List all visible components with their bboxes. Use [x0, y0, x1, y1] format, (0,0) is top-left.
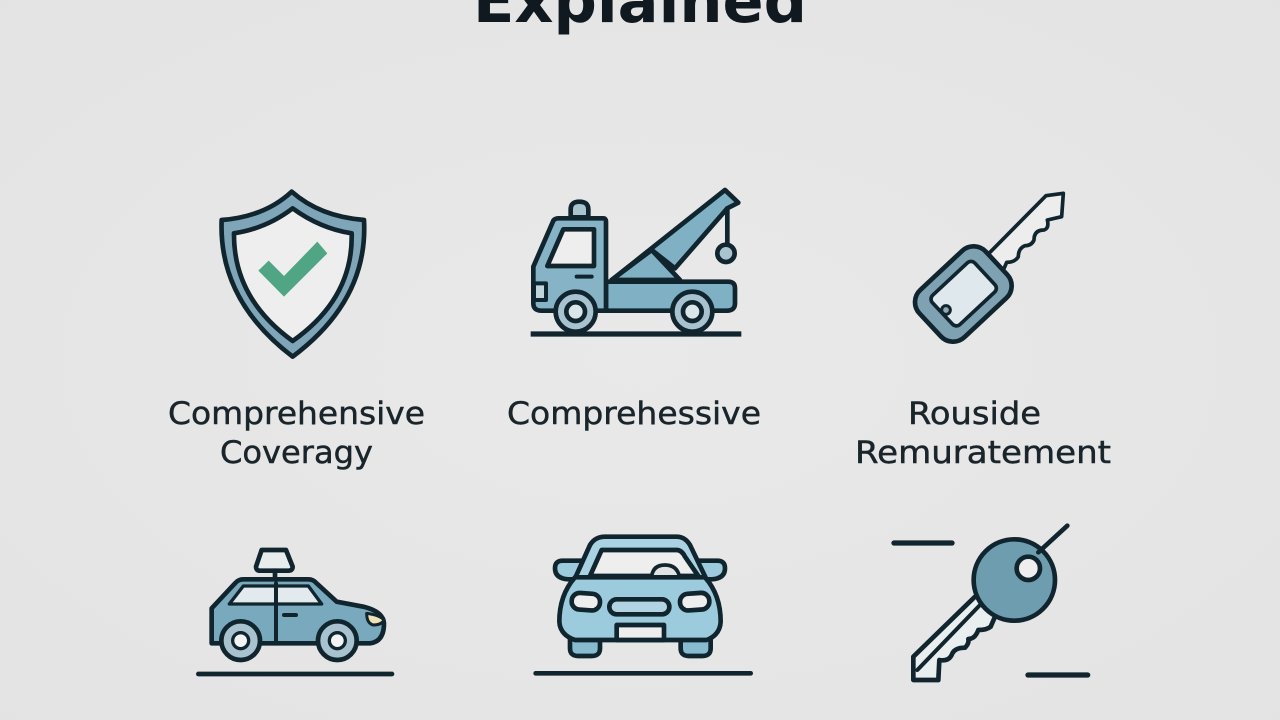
- label: Rouside Remuratement: Rouside: [908, 396, 1041, 432]
- blade: [913, 597, 995, 680]
- boom: [612, 190, 738, 280]
- icon: round key: [894, 526, 1088, 680]
- ground: [198, 667, 392, 681]
- mirrors: [555, 561, 583, 579]
- wheels: [556, 292, 596, 332]
- label: Rouside Remuratement: Remuratement: [855, 435, 1111, 471]
- body: [212, 579, 384, 643]
- headlight: [367, 613, 384, 625]
- beacon: [571, 202, 588, 217]
- icon: front view car: [536, 537, 751, 673]
- roof and windshield: [575, 537, 706, 578]
- label: Comprehensive Coverage: Comprehensive: [168, 396, 425, 432]
- icon: tow truck: [531, 190, 741, 334]
- roof sign: [256, 550, 293, 571]
- cab: [533, 218, 606, 311]
- label: Comprehensive Coverage: [168, 396, 425, 471]
- key head: [974, 539, 1055, 621]
- icon: shield with check mark: [222, 192, 364, 357]
- body: [559, 577, 721, 640]
- icon: car key fob: [908, 193, 1063, 349]
- headlights: [571, 592, 601, 611]
- bed: [606, 282, 735, 311]
- plate: [617, 625, 664, 640]
- ground: [536, 666, 751, 680]
- wheels: [221, 621, 260, 660]
- grille: [609, 599, 669, 614]
- label: Comprehensive Coverage: Coveragy: [220, 435, 373, 471]
- hook: [720, 208, 734, 245]
- icon: side view car with roof sign: [198, 550, 392, 674]
- label: Comprehessive: Comprehessive: [507, 396, 761, 432]
- label: Rouside Remuratement: [855, 396, 1111, 471]
- ground: [531, 326, 741, 342]
- dash marks: [894, 535, 952, 551]
- feet: [570, 638, 600, 656]
